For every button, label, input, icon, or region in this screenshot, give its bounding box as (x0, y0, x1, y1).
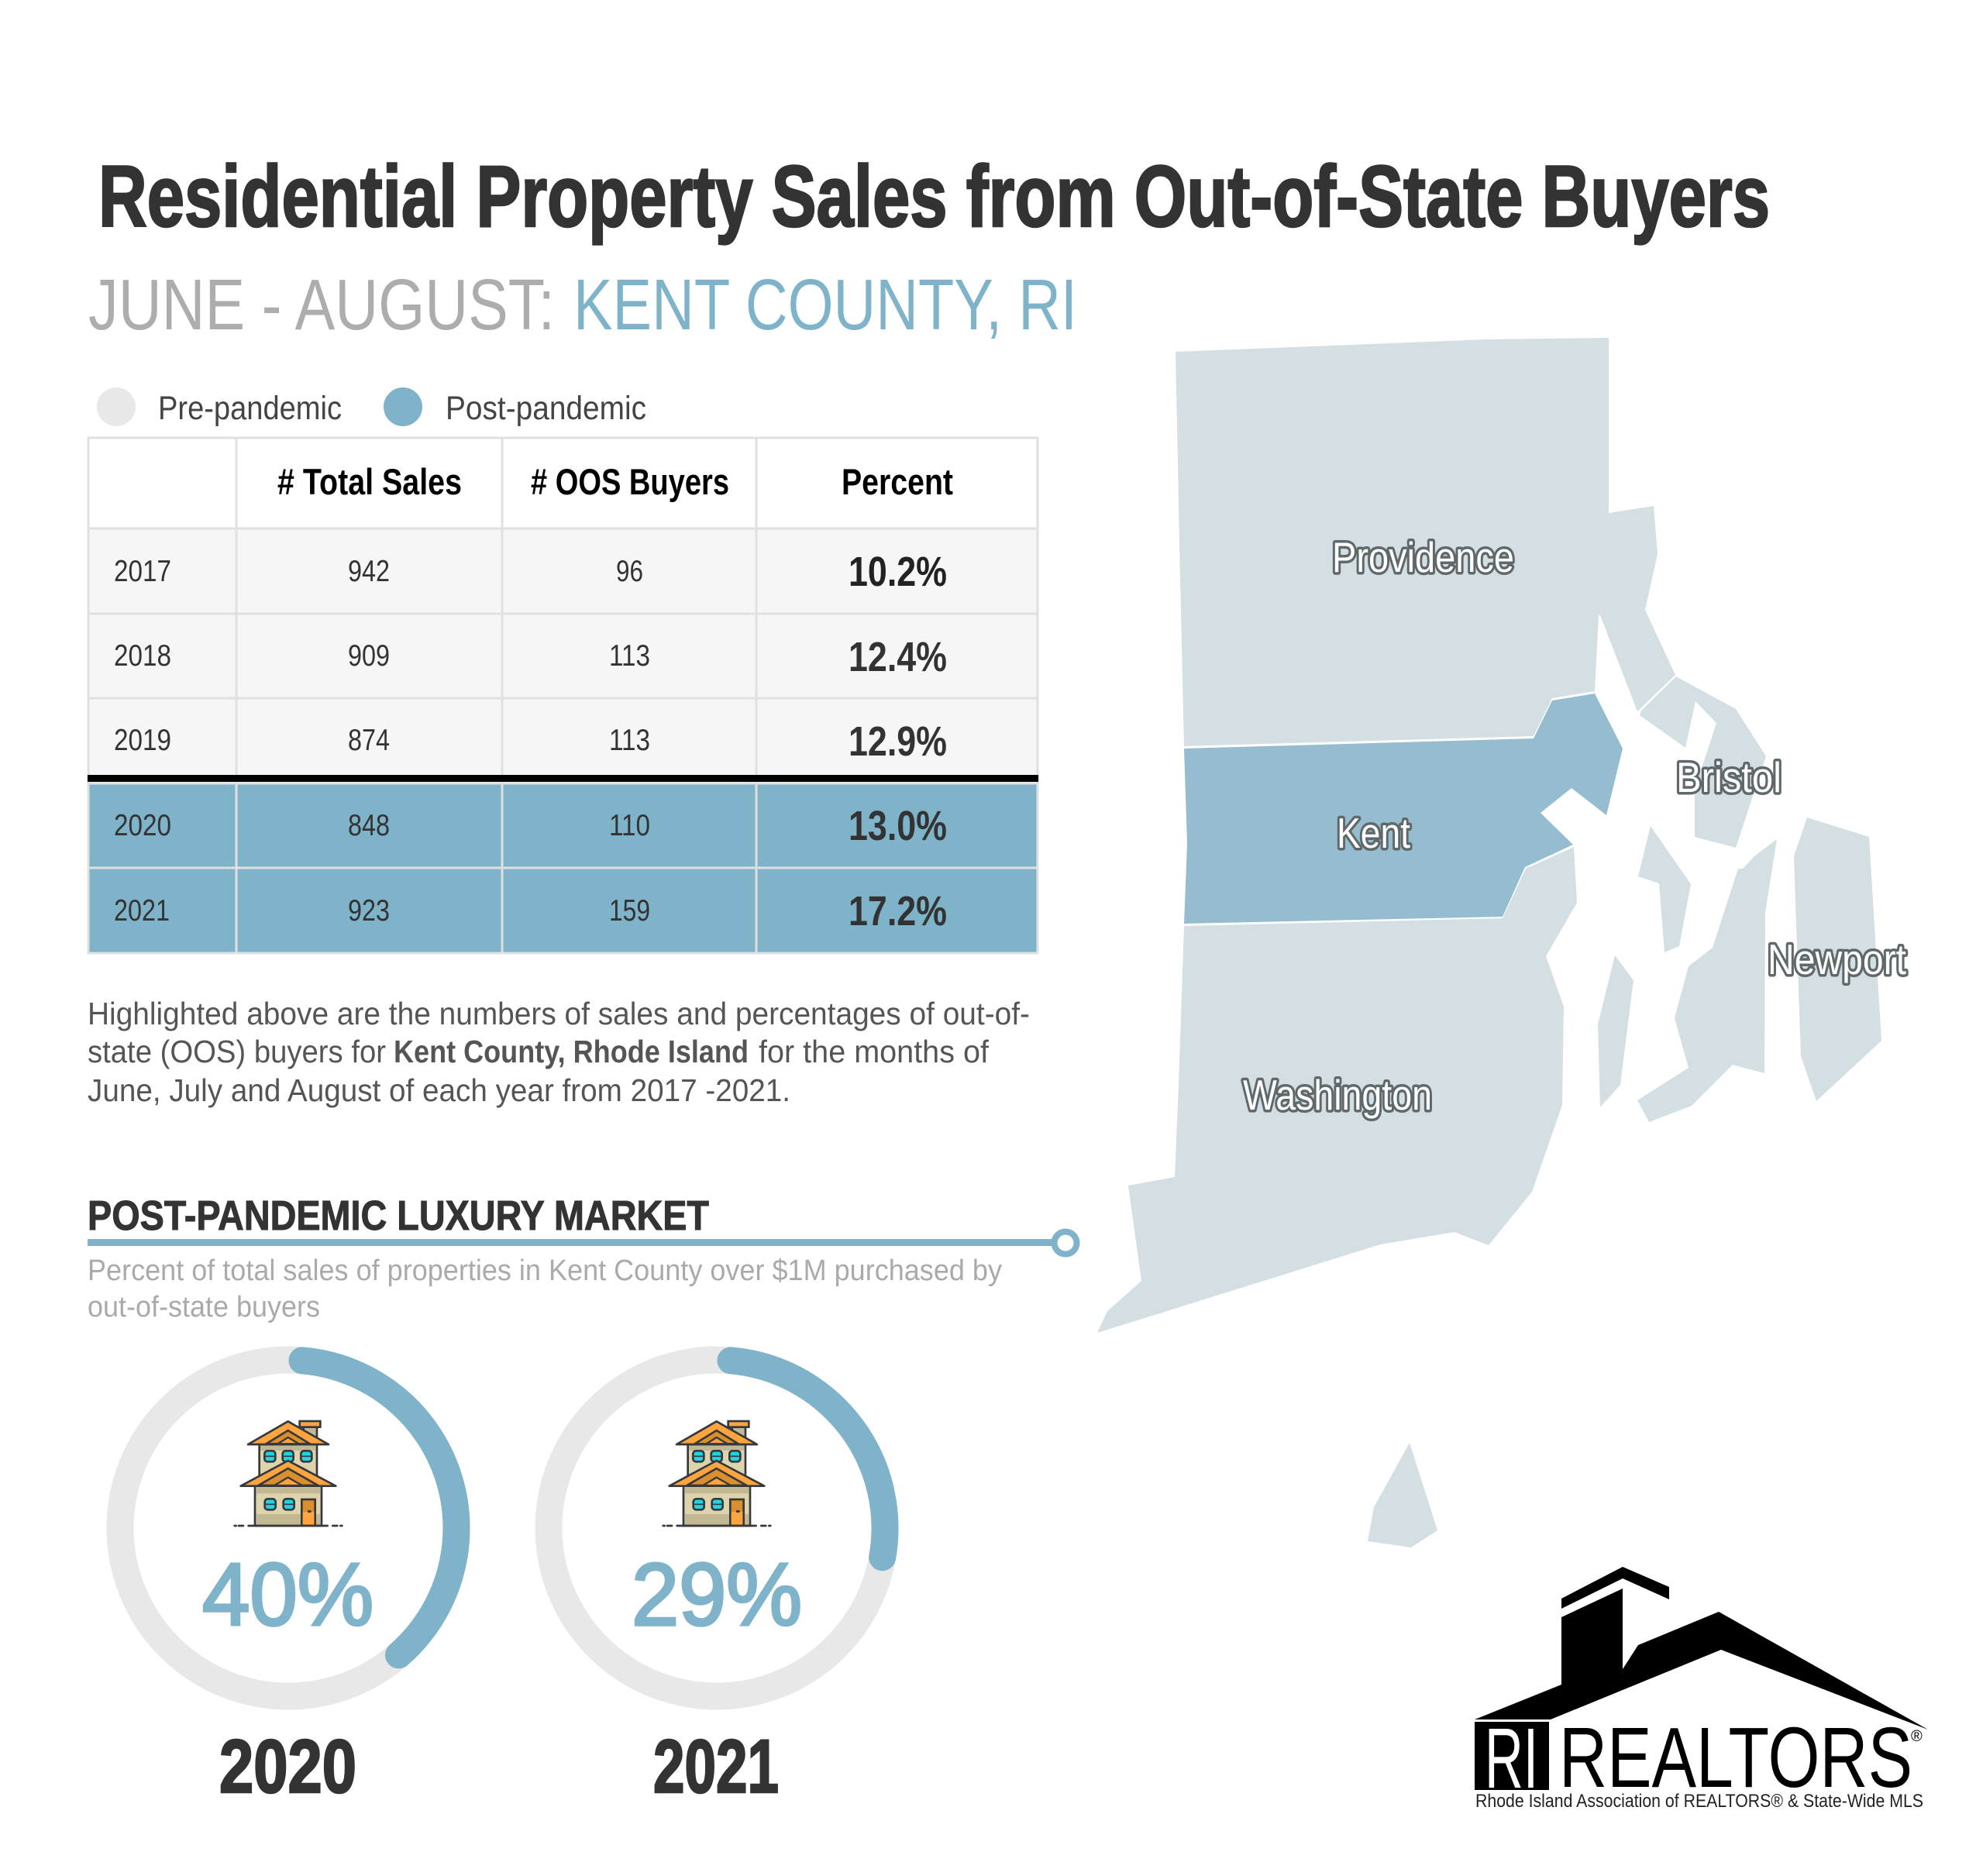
description paragraph: for the months of (759, 1034, 990, 1069)
row 2021: 2021 (114, 894, 170, 928)
county: Kent (1184, 694, 1623, 924)
row 2020: 2020 (114, 809, 171, 842)
icon: house 2020 (235, 1421, 342, 1526)
legend: Pre-pandemic (158, 390, 342, 427)
row 2018: 113 (609, 639, 650, 673)
row 2018: 2018 (114, 639, 171, 673)
value 40%: 40% (202, 1546, 374, 1644)
row 2019: 113 (609, 724, 650, 757)
row 2017: 96 (616, 555, 643, 588)
label: Bristol: Bristol (1676, 753, 1781, 801)
luxury market description: out-of-state buyers (88, 1291, 320, 1324)
donut chart: 2021 (549, 1360, 885, 1809)
row 2020: 110 (609, 809, 650, 842)
luxury market description (88, 1255, 1002, 1324)
description paragraph (88, 996, 1030, 1108)
row 2018: 909 (348, 639, 390, 673)
map of Rhode Island counties (1097, 338, 1906, 1547)
county: Washington (1097, 847, 1577, 1333)
label: Newport: Newport (1768, 935, 1906, 983)
county: Block Island (1368, 1443, 1437, 1547)
row 2021 (114, 888, 947, 935)
row 2019 (114, 718, 947, 765)
row 2021: 159 (609, 894, 650, 928)
donut chart: 2020 (120, 1360, 456, 1809)
value 29%: 29% (632, 1546, 802, 1644)
county: Newport, east mainland (1794, 818, 1881, 1101)
table header row (277, 461, 953, 502)
row 2020: 848 (348, 809, 390, 842)
heading rule with ring (88, 1232, 1077, 1254)
logo: RI Realtors: RI (1485, 1711, 1538, 1806)
table header row: # Total Sales (277, 461, 462, 502)
label: Providence: Providence (1332, 533, 1514, 581)
legend: Post-pandemic (446, 390, 646, 427)
luxury market description: Percent of total sales of properties in Kent County over $1M purchased by (88, 1255, 1002, 1287)
county: Bristol (1640, 676, 1766, 848)
county: Providence (1176, 338, 1675, 746)
row 2018 (114, 634, 947, 680)
row 2020 (114, 803, 947, 849)
icon: house 2021 (663, 1421, 770, 1526)
row 2017: 2017 (114, 555, 171, 588)
county: Newport, Aquidneck Island (1637, 839, 1777, 1122)
year 2021: 2021 (653, 1724, 779, 1809)
subtitle: KENT COUNTY, RI (573, 264, 1077, 345)
label: Kent: Kent (1337, 809, 1410, 857)
table header row: # OOS Buyers (531, 461, 729, 502)
description paragraph: state (OOS) buyers for (88, 1034, 386, 1069)
table header row: Percent (842, 461, 953, 502)
county: Newport, Conanicut Island (1598, 955, 1633, 1107)
description paragraph: June, July and August of each year from 2017 -2021. (88, 1072, 790, 1108)
row 2020: 13.0% (849, 803, 947, 849)
year 2020: 2020 (219, 1724, 356, 1809)
section heading: luxury market: POST-PANDEMIC LUXURY MARKET (88, 1193, 709, 1239)
county: Newport, Prudence Island (1638, 826, 1691, 952)
data table (88, 438, 1038, 953)
logo: RI Realtors (1475, 1567, 1928, 1812)
row 2017: 942 (348, 555, 390, 588)
row 2019: 2019 (114, 724, 171, 757)
logo: RI Realtors: ® (1911, 1728, 1923, 1745)
row 2017 (114, 549, 947, 595)
description paragraph: Highlighted above are the numbers of sales and percentages of out-of- (88, 996, 1030, 1031)
row 2017: 10.2% (849, 549, 947, 595)
subtitle: JUNE - AUGUST: (88, 264, 555, 345)
row 2019: 874 (348, 724, 390, 757)
subtitle (88, 264, 1077, 345)
legend (97, 387, 646, 427)
label: Washington: Washington (1243, 1071, 1432, 1119)
row 2018: 12.4% (849, 634, 947, 680)
row 2021: 17.2% (849, 888, 947, 935)
logo: RI Realtors: Rhode Island Association of REALTORS® & State-Wide MLS (1475, 1791, 1923, 1812)
row 2021: 923 (348, 894, 390, 928)
row 2019: 12.9% (849, 718, 947, 765)
description paragraph: Kent County, Rhode Island (394, 1034, 749, 1069)
